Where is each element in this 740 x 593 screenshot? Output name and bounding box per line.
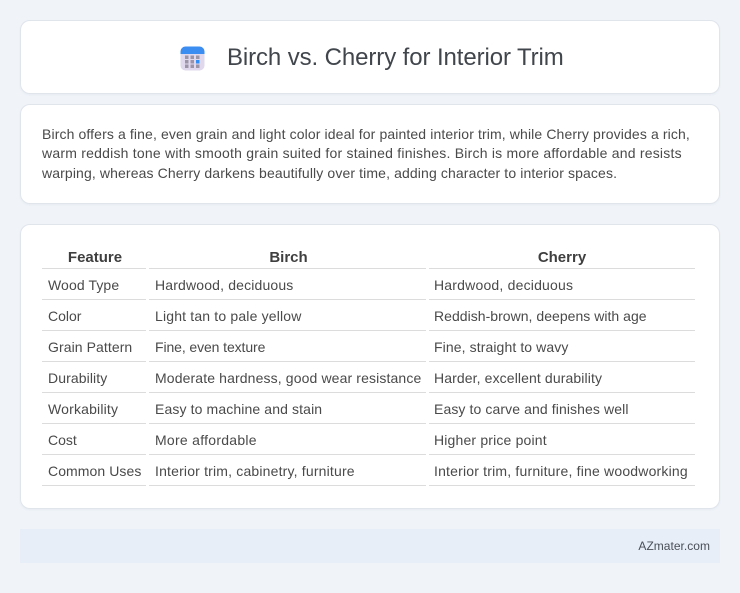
row: cost: More affordable [155,432,257,448]
row: grain pattern: Fine, even texture [155,339,265,355]
intro paragraph: warm reddish tone with smooth grain suited for stained finishes. Birch is more affordable and resists [42,145,682,161]
row: cost: Higher price point [434,432,547,448]
row: color: Reddish-brown, deepens with age [434,308,647,324]
intro paragraph: warping, whereas Cherry darkens beautifully over time, adding character to interior spaces. [42,164,617,180]
row: workability: Easy to carve and finishes well [434,401,629,417]
panel: intro text [20,104,720,204]
row: workability [42,401,695,424]
row: durability: Moderate hardness, good wear resistance [155,370,421,386]
row: grain pattern [42,339,695,362]
row: grain pattern: Fine, straight to wavy [434,339,568,355]
row: workability: Workability [48,401,118,417]
intro paragraph: Birch offers a fine, even grain and light color ideal for painted interior trim, while Cherry provides a rich, [42,126,690,142]
title: Birch vs. Cherry for Interior Trim [227,44,564,71]
footer bar [20,529,720,563]
row: workability: Easy to machine and stain [155,401,322,417]
row: common uses: Common Uses [48,463,141,479]
row: grain pattern: Grain Pattern [48,339,132,355]
table header: Cherry [538,249,586,266]
row: durability: Durability [48,370,107,386]
row: durability [42,370,695,393]
table header: Feature [68,249,122,266]
row: color: Color [48,308,81,324]
intro paragraph [42,126,690,181]
row: common uses [42,463,695,486]
row: wood type: Hardwood, deciduous [155,277,293,293]
row: durability: Harder, excellent durability [434,370,602,386]
row: wood type [42,277,695,300]
row: wood type: Wood Type [48,277,119,293]
icon: calendar [180,46,204,70]
row: color: Light tan to pale yellow [155,308,302,324]
footer credit: AZmater.com [638,539,710,553]
row: cost [42,432,695,455]
row: wood type: Hardwood, deciduous [434,277,573,293]
table header: Birch [269,249,308,266]
panel: title card [20,20,720,94]
table header [42,249,695,269]
row: color [42,308,695,331]
row: cost: Cost [48,432,77,448]
row: common uses: Interior trim, furniture, fine woodworking [434,463,688,479]
row: common uses: Interior trim, cabinetry, furniture [155,463,355,479]
panel: comparison table [20,224,720,509]
